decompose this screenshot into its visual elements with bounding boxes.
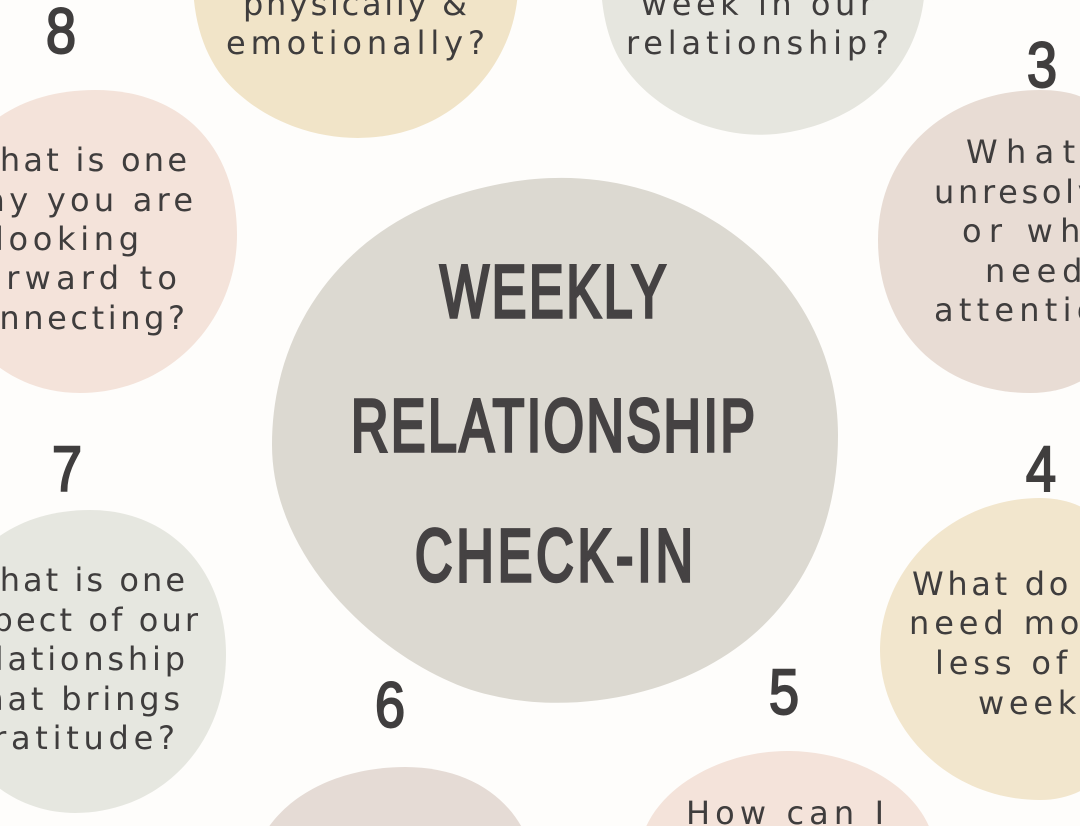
question 2 text: relationship? [626, 24, 889, 62]
panel: question 6 [258, 669, 530, 826]
number 3: 3 [1027, 29, 1057, 101]
panel: question 5 [640, 656, 935, 826]
blob: question 8 [0, 90, 237, 393]
question 2 text [626, 0, 889, 62]
number 5: 5 [769, 656, 799, 728]
panel: question 2 [601, 0, 925, 135]
question 8 text [0, 141, 193, 337]
blob: center [272, 178, 838, 703]
question 3 text [934, 133, 1080, 329]
blob: question 4 [880, 498, 1080, 800]
blob: question 6 [258, 767, 530, 826]
panel: question 1 [193, 0, 518, 138]
number 7: 7 [52, 433, 82, 505]
center circle: title [272, 178, 838, 703]
question 7 text [0, 561, 199, 757]
title: WEEKLY RELATIONSHIP CHECK-IN: CHECK-IN [415, 514, 693, 597]
panel: question 7 [0, 433, 226, 813]
blob: question 5 [640, 751, 935, 826]
panel: question 3 [878, 29, 1080, 393]
question 1 text: emotionally? [226, 24, 485, 62]
blob: question 3 [878, 90, 1080, 393]
blob: question 7 [0, 510, 226, 813]
panel: question 4 [880, 433, 1080, 800]
blob: question 2 [601, 0, 925, 135]
title: WEEKLY RELATIONSHIP CHECK-IN [351, 250, 755, 597]
blob: question 1 [193, 0, 518, 138]
panel: question 8 [0, 0, 237, 393]
number 6: 6 [375, 669, 405, 741]
title: WEEKLY RELATIONSHIP CHECK-IN: RELATIONSHIP [351, 384, 755, 467]
number 4: 4 [1026, 433, 1056, 505]
question 1 text [226, 0, 485, 62]
title: WEEKLY RELATIONSHIP CHECK-IN: WEEKLY [440, 250, 666, 333]
question 4 text [909, 565, 1080, 722]
